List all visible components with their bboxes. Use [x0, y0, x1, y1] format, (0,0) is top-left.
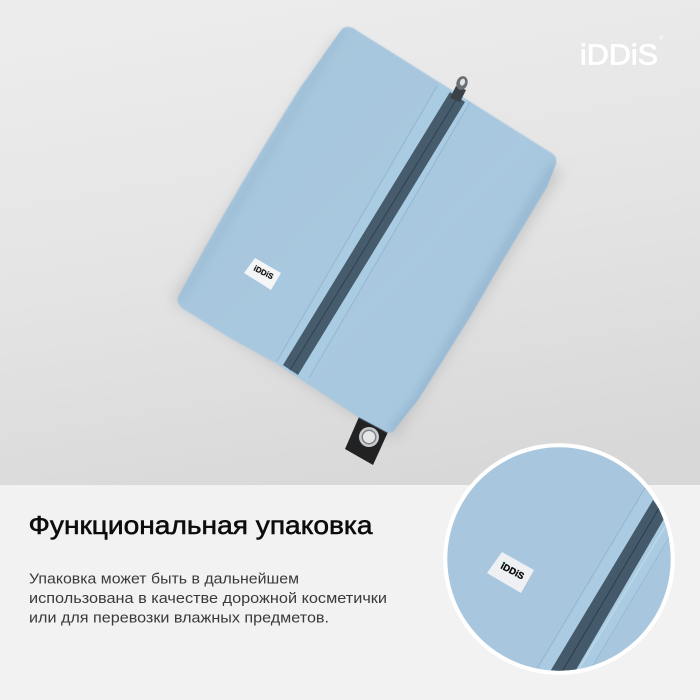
circle zipper — [548, 500, 665, 675]
zipper tape — [283, 92, 465, 375]
body text — [29, 570, 387, 626]
bottom text panel — [0, 485, 700, 700]
photo background — [0, 0, 700, 485]
hanging tab — [345, 417, 388, 465]
circle zipper split — [560, 508, 659, 675]
circle fabric — [447, 447, 671, 671]
circle flap — [538, 522, 669, 671]
product photo: pouch — [172, 27, 562, 465]
logo: ® — [659, 35, 664, 42]
zoomed detail circle — [440, 440, 680, 680]
flap seams — [277, 86, 470, 378]
zipper flap — [440, 83, 470, 102]
pouch body — [178, 27, 556, 433]
body text: Упаковка может быть в дальнейшем — [29, 570, 299, 588]
circle stitching — [577, 525, 666, 672]
pouch edge shading — [180, 29, 556, 432]
circle flap seam — [535, 488, 645, 672]
zipper pull — [450, 76, 468, 102]
title: Функциональная упаковка — [28, 510, 373, 540]
circle woven label — [487, 552, 534, 593]
sewn label: iDDiS — [252, 264, 275, 282]
pouch shadow — [172, 35, 562, 440]
body text: или для перевозки влажных предметов. — [29, 610, 329, 626]
logo: iDDiS — [580, 40, 658, 72]
circle woven label: iDDiS — [499, 561, 526, 582]
body text: использована в качестве дорожной косметички — [29, 590, 387, 607]
circle right seam — [592, 538, 669, 666]
sewn label — [244, 258, 281, 290]
